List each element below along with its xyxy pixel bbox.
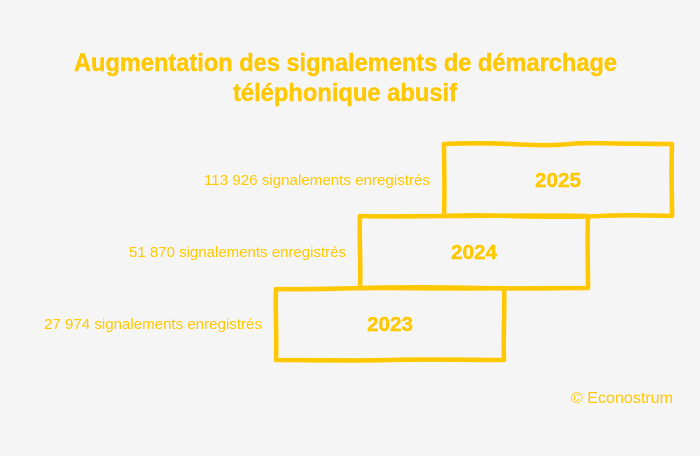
label 2025: 113 926 signalements enregistrés bbox=[204, 173, 430, 189]
box 2025 bbox=[444, 143, 672, 217]
label 2024: 51 870 signalements enregistrés bbox=[129, 245, 346, 261]
step: 2024 bbox=[129, 216, 588, 288]
box 2024 bbox=[360, 216, 588, 288]
year 2023: 2023 bbox=[367, 314, 413, 336]
title: Augmentation des signalements de démarchage bbox=[74, 49, 617, 77]
step: 2025 bbox=[204, 143, 672, 217]
step: 2023 bbox=[44, 288, 504, 360]
title bbox=[74, 49, 617, 107]
year 2024: 2024 bbox=[451, 242, 498, 264]
title: téléphonique abusif bbox=[233, 79, 458, 107]
year 2025: 2025 bbox=[535, 170, 581, 192]
label 2023: 27 974 signalements enregistrés bbox=[44, 317, 262, 333]
credit: © Econostrum bbox=[571, 390, 673, 407]
box 2023 bbox=[276, 288, 504, 360]
